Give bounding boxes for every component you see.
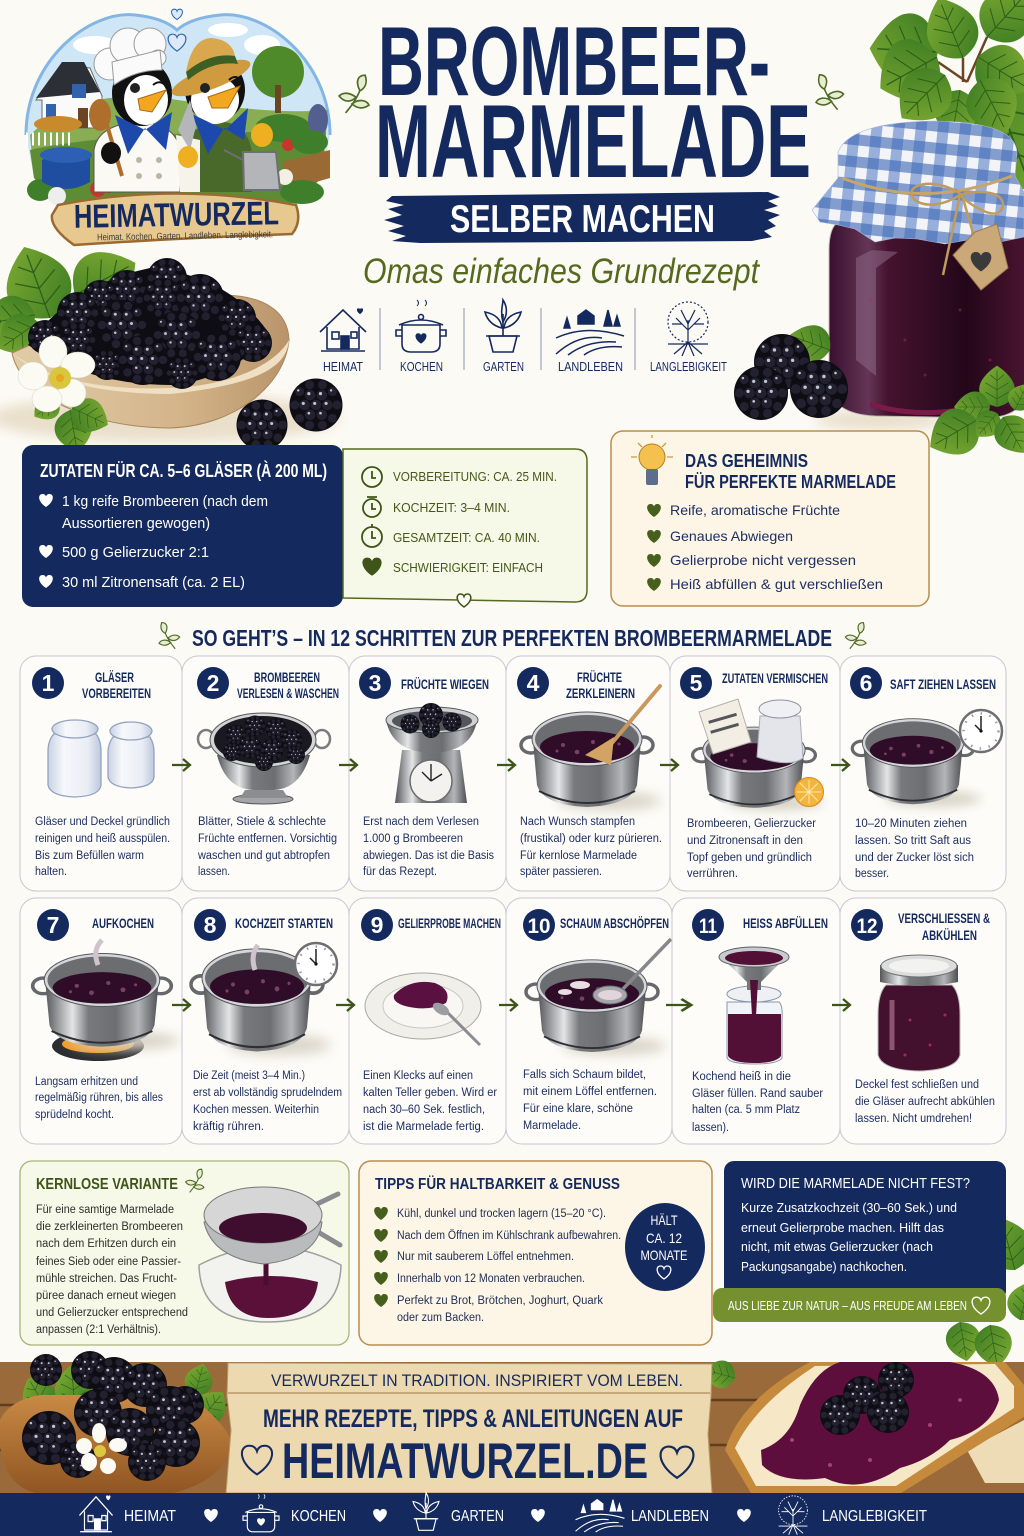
logo: Heimatwurzel penguins: Heimat. Kochen. Garten. Landleben. Langlebigkeit. (97, 229, 273, 243)
step 12: Deckel fest schließen und (855, 1079, 979, 1091)
step 5: und Zitronensaft in den (687, 835, 803, 847)
panel: times (343, 449, 587, 607)
icon: Heimat (320, 308, 366, 374)
icon: Heimat: HEIMAT (323, 360, 363, 374)
step 9: GELIERPROBE MACHEN (398, 916, 501, 931)
step 6 (840, 656, 1006, 891)
step 9: kalten Teller geben. Wird er (363, 1087, 497, 1099)
leaves top right (865, 0, 1024, 207)
wooden sign (226, 1363, 712, 1493)
panel: troubleshooting (724, 1161, 1006, 1301)
step 9: nach 30–60 Sek. festlich, (363, 1104, 485, 1116)
panel: seedless variant: feines Sieb oder eine Passier- (36, 1256, 181, 1268)
footer item: Kochen: KOCHEN (291, 1508, 346, 1525)
wooden sign: VERWURZELT IN TRADITION. INSPIRIERT VOM LEBEN. (271, 1371, 683, 1390)
panel: troubleshooting: nicht, mit etwas Gelierzucker (nach (741, 1239, 933, 1254)
footer item: Kochen (243, 1494, 346, 1532)
panel: secret (611, 431, 929, 606)
step 11: lassen). (692, 1122, 729, 1134)
step 4: Nach Wunsch stampfen (520, 816, 635, 828)
step 8: Die Zeit (meist 3–4 Min.) (193, 1070, 305, 1082)
icon: pot with timer (191, 943, 337, 1055)
panel: ingredients: 30 ml Zitronensaft (ca. 2 EL) (62, 574, 245, 591)
step 7: AUFKOCHEN (92, 916, 154, 931)
tagline: Omas einfaches Grundrezept (363, 252, 760, 291)
subtitle banner: SELBER MACHEN (450, 198, 715, 241)
arrows between steps (172, 759, 850, 1011)
step 10 (506, 898, 672, 1144)
step 5: verrühren. (687, 868, 738, 880)
badge: 12 months: HÄLT (650, 1212, 678, 1228)
steps heading: SO GEHT’S – IN 12 SCHRITTEN ZUR PERFEKTEN BROMBEERMARMELADE (192, 625, 832, 651)
green slogan band (713, 1288, 1006, 1322)
step 7: sprüdelnd kocht. (35, 1109, 114, 1121)
icon: light bulb (631, 435, 673, 485)
footer item: Heimat: HEIMAT (124, 1508, 176, 1525)
panel: secret: Gelierprobe nicht vergessen (670, 552, 856, 568)
step 5 (670, 656, 840, 891)
panel: troubleshooting: WIRD DIE MARMELADE NICHT FEST? (741, 1175, 970, 1192)
step 3: 3 (369, 670, 381, 696)
step 3 (349, 656, 506, 891)
step 6: lassen. So tritt Saft aus (855, 835, 971, 847)
badge: 12 months: MONATE (640, 1247, 688, 1263)
panel: tips: Nur mit sauberem Löffel entnehmen. (397, 1251, 574, 1263)
title: BROMBEER- (378, 6, 770, 116)
step 10: mit einem Löffel entfernen. (523, 1086, 657, 1098)
icon: Kochen (396, 300, 446, 374)
panel: tips: Nach dem Öffnen im Kühlschrank aufbewahren. (397, 1230, 621, 1242)
panel: times: GESAMTZEIT: CA. 40 MIN. (393, 531, 540, 545)
panel: troubleshooting: Packungsangabe) nachkochen. (741, 1259, 907, 1274)
step 1: halten. (35, 866, 67, 878)
step 12: VERSCHLIESSEN & (898, 911, 990, 926)
step 10: Marmelade. (523, 1120, 581, 1132)
panel: secret: Genaues Abwiegen (670, 528, 793, 544)
step 3: 1.000 g Brombeeren (363, 833, 463, 845)
panel: tips: TIPPS FÜR HALTBARKEIT & GENUSS (375, 1174, 620, 1193)
step 7: 7 (47, 912, 59, 938)
panel: secret: Heiß abfüllen & gut verschließen (670, 576, 883, 592)
step 1: Bis zum Befüllen warm (35, 850, 144, 862)
panel: seedless variant: Für eine samtige Marmelade (36, 1204, 174, 1216)
step 9 (349, 898, 506, 1144)
panel: seedless variant: püree danach erneut wiegen (36, 1290, 176, 1302)
panel: secret: FÜR PERFEKTE MARMELADE (685, 472, 896, 492)
step 8 (182, 898, 349, 1144)
step 8: Kochen messen. Weiterhin (193, 1104, 319, 1116)
icon: pot on gas burner (33, 940, 180, 1061)
step 1: GLÄSER (95, 670, 134, 685)
step 5: ZUTATEN VERMISCHEN (722, 671, 828, 686)
icon: Kochen: KOCHEN (400, 360, 443, 374)
footer wood scene (0, 1362, 1024, 1494)
footer bowl of berries (0, 1351, 235, 1494)
wooden sign: MEHR REZEPTE, TIPPS & ANLEITUNGEN AUF (263, 1405, 683, 1433)
leaves near jar bottom (919, 366, 1024, 467)
icon: Garten (483, 300, 524, 374)
step 3: abwiegen. Das ist die Basis (363, 850, 494, 862)
panel: ingredients: ZUTATEN FÜR CA. 5–6 GLÄSER (À 200 ML) (40, 460, 327, 481)
icon: pot with skimmer (526, 939, 671, 1055)
icon: closed jam jar (878, 955, 960, 1071)
footer item: Landleben: LANDLEBEN (631, 1508, 709, 1525)
wooden sign: HEIMATWURZEL.DE (282, 1433, 648, 1489)
badge: 12 months (625, 1203, 705, 1291)
step 4: 4 (527, 670, 540, 696)
icon: funnel over jar (719, 947, 789, 1064)
step 1 (20, 656, 182, 891)
step 3: FRÜCHTE WIEGEN (401, 677, 489, 692)
step 2: VERLESEN & WASCHEN (237, 686, 339, 701)
decorative sprigs near title (339, 75, 844, 113)
panel: ingredients: 1 kg reife Brombeeren (nach dem (62, 493, 268, 510)
step 3: Erst nach dem Verlesen (363, 816, 479, 828)
step 12 (840, 898, 1006, 1144)
icon: Garten: GARTEN (483, 360, 524, 374)
step 8: 8 (204, 912, 217, 938)
panel: secret: DAS GEHEIMNIS (685, 451, 808, 471)
footer toast with jam (700, 1356, 1024, 1493)
step 2: Blätter, Stiele & schlechte (198, 816, 326, 828)
step 6: 10–20 Minuten ziehen (855, 818, 967, 830)
step 7: regelmäßig rühren, bis alles (35, 1092, 163, 1104)
step 11: HEISS ABFÜLLEN (743, 916, 828, 931)
step 2: waschen und gut abtropfen (197, 850, 330, 862)
step 4: FRÜCHTE (577, 670, 622, 685)
panel: seedless variant: und Gelierzucker entsprechend (36, 1307, 188, 1319)
panel: seedless variant: nach dem Erhitzen durch ein (36, 1238, 176, 1250)
footer item: Garten (413, 1493, 504, 1530)
icon: pot with clock (852, 710, 1002, 807)
step 2: lassen. (198, 866, 230, 878)
step 2: 2 (207, 670, 219, 696)
panel: tips (359, 1161, 712, 1345)
footer navigation bar (0, 1493, 1024, 1536)
panel: seedless variant: mühle streichen. Das Frucht- (36, 1273, 177, 1285)
step 1: 1 (42, 670, 55, 696)
icon: Landleben (556, 310, 624, 374)
panel: times: KOCHZEIT: 3–4 MIN. (393, 501, 510, 515)
step 10: SCHAUM ABSCHÖPFEN (560, 916, 669, 931)
loose berries front (236, 378, 342, 450)
step 9: 9 (371, 912, 383, 938)
step 10: 10 (528, 915, 550, 938)
step 6: und der Zucker löst sich (855, 852, 974, 864)
footer item: Landleben (576, 1500, 709, 1532)
step 6: besser. (855, 868, 889, 880)
panel: secret: Reife, aromatische Früchte (670, 502, 840, 518)
step 5: Brombeeren, Gelierzucker (687, 818, 816, 830)
step 8: erst ab vollständig sprudelndem (193, 1087, 342, 1099)
step 5: 5 (690, 670, 703, 696)
step 8: KOCHZEIT STARTEN (235, 916, 333, 931)
footer item: Heimat (79, 1495, 176, 1532)
icon: pot with wooden spoon (521, 686, 661, 810)
logo: Heimatwurzel penguins (26, 9, 330, 245)
step 2 (182, 656, 349, 891)
icon: empty jars (48, 720, 154, 797)
step 2: Früchte entfernen. Vorsichtig (198, 833, 337, 845)
step 4: Für kernlose Marmelade (520, 850, 637, 862)
title (375, 6, 811, 200)
panel: seedless variant: die zerkleinerten Brombeeren (36, 1221, 183, 1233)
step 1: reinigen und heiß ausspülen. (35, 833, 170, 845)
bowl of blackberries (0, 236, 340, 456)
panel: tips: oder zum Backen. (397, 1312, 484, 1324)
icon row (320, 300, 727, 374)
icon: plate with jam and spoon (365, 973, 481, 1045)
step 1: VORBEREITEN (82, 686, 151, 701)
icon: Landleben: LANDLEBEN (558, 360, 623, 374)
step 11: 11 (699, 915, 717, 938)
icon: kitchen scale (386, 703, 478, 803)
badge: 12 months: CA. 12 (646, 1230, 682, 1246)
step 3: für das Rezept. (363, 866, 437, 878)
icon: colander with berries (198, 713, 330, 804)
panel: tips: Perfekt zu Brot, Brötchen, Joghurt, Quark (397, 1295, 603, 1307)
panel: troubleshooting: erneut Gelierprobe machen. Hilft das (741, 1220, 944, 1235)
step 5: Topf geben und gründlich (687, 852, 812, 864)
panel: times: SCHWIERIGKEIT: EINFACH (393, 561, 543, 575)
panel: seedless variant: KERNLOSE VARIANTE (36, 1176, 178, 1193)
step 12: 12 (856, 915, 878, 938)
step 9: ist die Marmelade fertig. (363, 1121, 484, 1133)
step 7: Langsam erhitzen und (35, 1076, 138, 1088)
footer item: Garten: GARTEN (451, 1508, 504, 1525)
step 2: BROMBEEREN (254, 670, 320, 685)
icon: Langlebigkeit: LANGLEBIGKEIT (650, 360, 727, 374)
step 1: Gläser und Deckel gründlich (35, 816, 170, 828)
icon: sieve over bowl (199, 1187, 341, 1322)
step 4: (frustikal) oder kurz pürieren. (520, 833, 662, 845)
green slogan band: AUS LIEBE ZUR NATUR – AUS FREUDE AM LEBEN (728, 1299, 967, 1313)
panel: troubleshooting: Kurze Zusatzkochzeit (30–60 Sek.) und (741, 1200, 957, 1215)
step 7 (20, 898, 182, 1144)
step 11: Kochend heiß in die (692, 1071, 791, 1083)
panel: times: VORBEREITUNG: CA. 25 MIN. (393, 470, 557, 484)
footer item: Langlebigkeit (779, 1496, 927, 1535)
icon: pot with sugar and lemon (693, 699, 824, 810)
step 6: 6 (860, 670, 872, 696)
step 11 (672, 898, 840, 1144)
panel: ingredients: Aussortieren gewogen) (62, 515, 210, 532)
logo: Heimatwurzel penguins: HEIMATWURZEL (74, 194, 279, 235)
panel: ingredients (22, 445, 343, 607)
panel: tips: Kühl, dunkel und trocken lagern (15–20 °C). (397, 1208, 606, 1220)
subtitle banner (384, 192, 780, 243)
step 10: Falls sich Schaum bildet, (523, 1069, 646, 1081)
panel: ingredients: 500 g Gelierzucker 2:1 (62, 544, 209, 561)
step 4 (506, 656, 670, 891)
step 12: die Gläser aufrecht abkühlen (855, 1096, 995, 1108)
step 12: lassen. Nicht umdrehen! (855, 1113, 972, 1125)
step 4: ZERKLEINERN (566, 686, 635, 701)
step 12: ABKÜHLEN (922, 928, 977, 943)
leaves behind navy panel (943, 1212, 1024, 1371)
step 10: Für eine klare, schöne (523, 1103, 633, 1115)
step 11: Gläser füllen. Rand sauber (692, 1088, 823, 1100)
footer item: Langlebigkeit: LANGLEBIGKEIT (822, 1508, 927, 1525)
loose berries by jar (734, 318, 848, 420)
step 8: kräftig rühren. (193, 1121, 264, 1133)
panel: seedless variant: anpassen (2:1 Verhältnis). (36, 1324, 161, 1336)
step 4: später passieren. (520, 866, 602, 878)
shelf under jar (815, 410, 945, 430)
panel: tips: Innerhalb von 12 Monaten verbrauchen. (397, 1273, 585, 1285)
jam jar hero (812, 121, 1024, 418)
step 9: Einen Klecks auf einen (363, 1070, 473, 1082)
panel: seedless variant (20, 1161, 349, 1345)
icon: Langlebigkeit (650, 302, 727, 374)
step 11: halten (ca. 5 mm Platz (692, 1104, 800, 1116)
